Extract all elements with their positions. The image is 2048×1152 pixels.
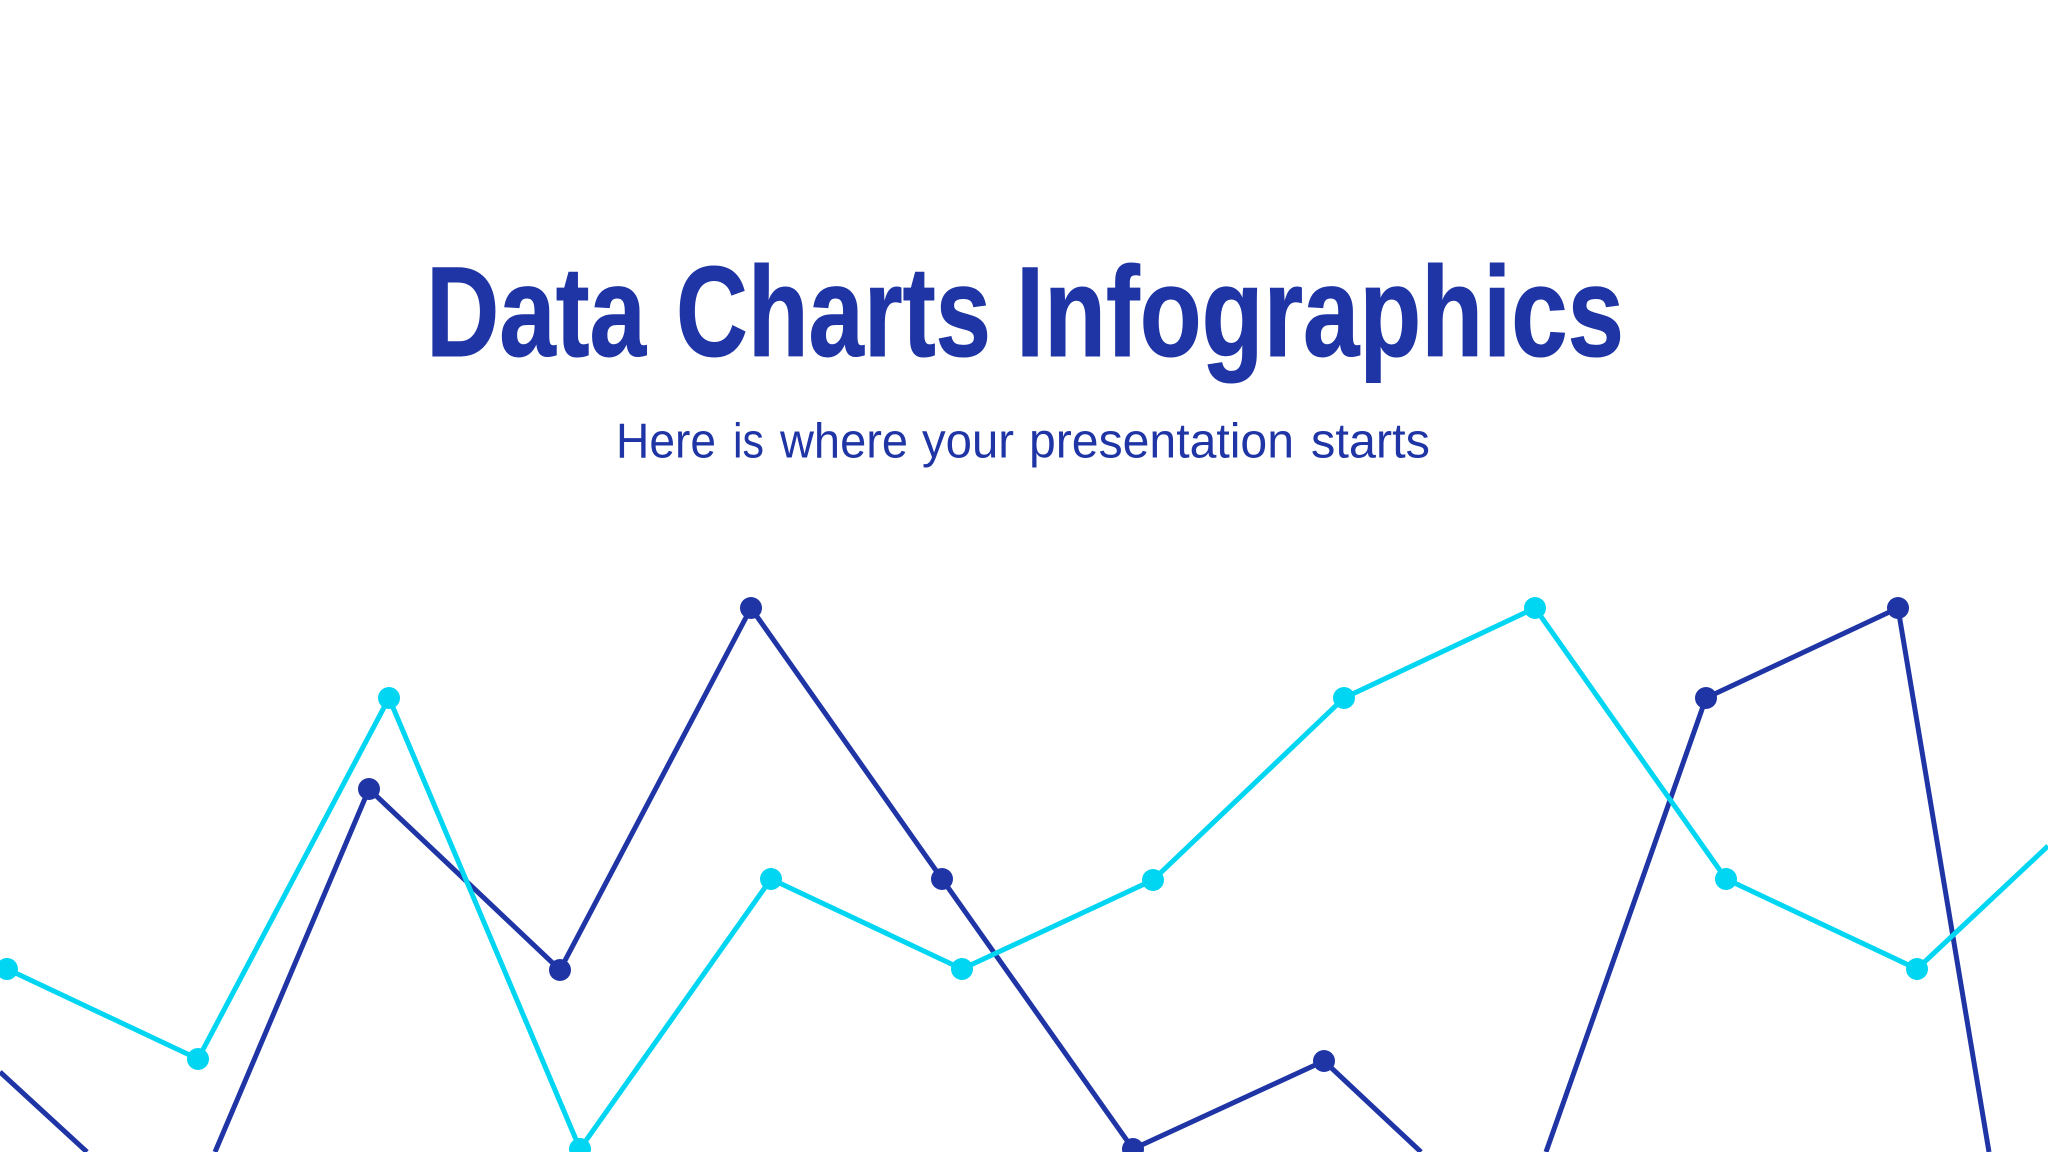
subtitle: presentation bbox=[1029, 414, 1294, 468]
subtitle: starts bbox=[1311, 414, 1430, 468]
subtitle: your bbox=[922, 414, 1014, 468]
subtitle: Here bbox=[616, 414, 716, 468]
subtitle bbox=[616, 414, 1430, 468]
subtitle: where bbox=[779, 414, 908, 468]
title: Data bbox=[426, 240, 647, 383]
title: Charts bbox=[676, 240, 991, 383]
subtitle: is bbox=[733, 414, 764, 468]
line chart: cyan series bbox=[0, 597, 2048, 1152]
line chart: navy series bbox=[0, 597, 1989, 1152]
title bbox=[426, 240, 1624, 383]
